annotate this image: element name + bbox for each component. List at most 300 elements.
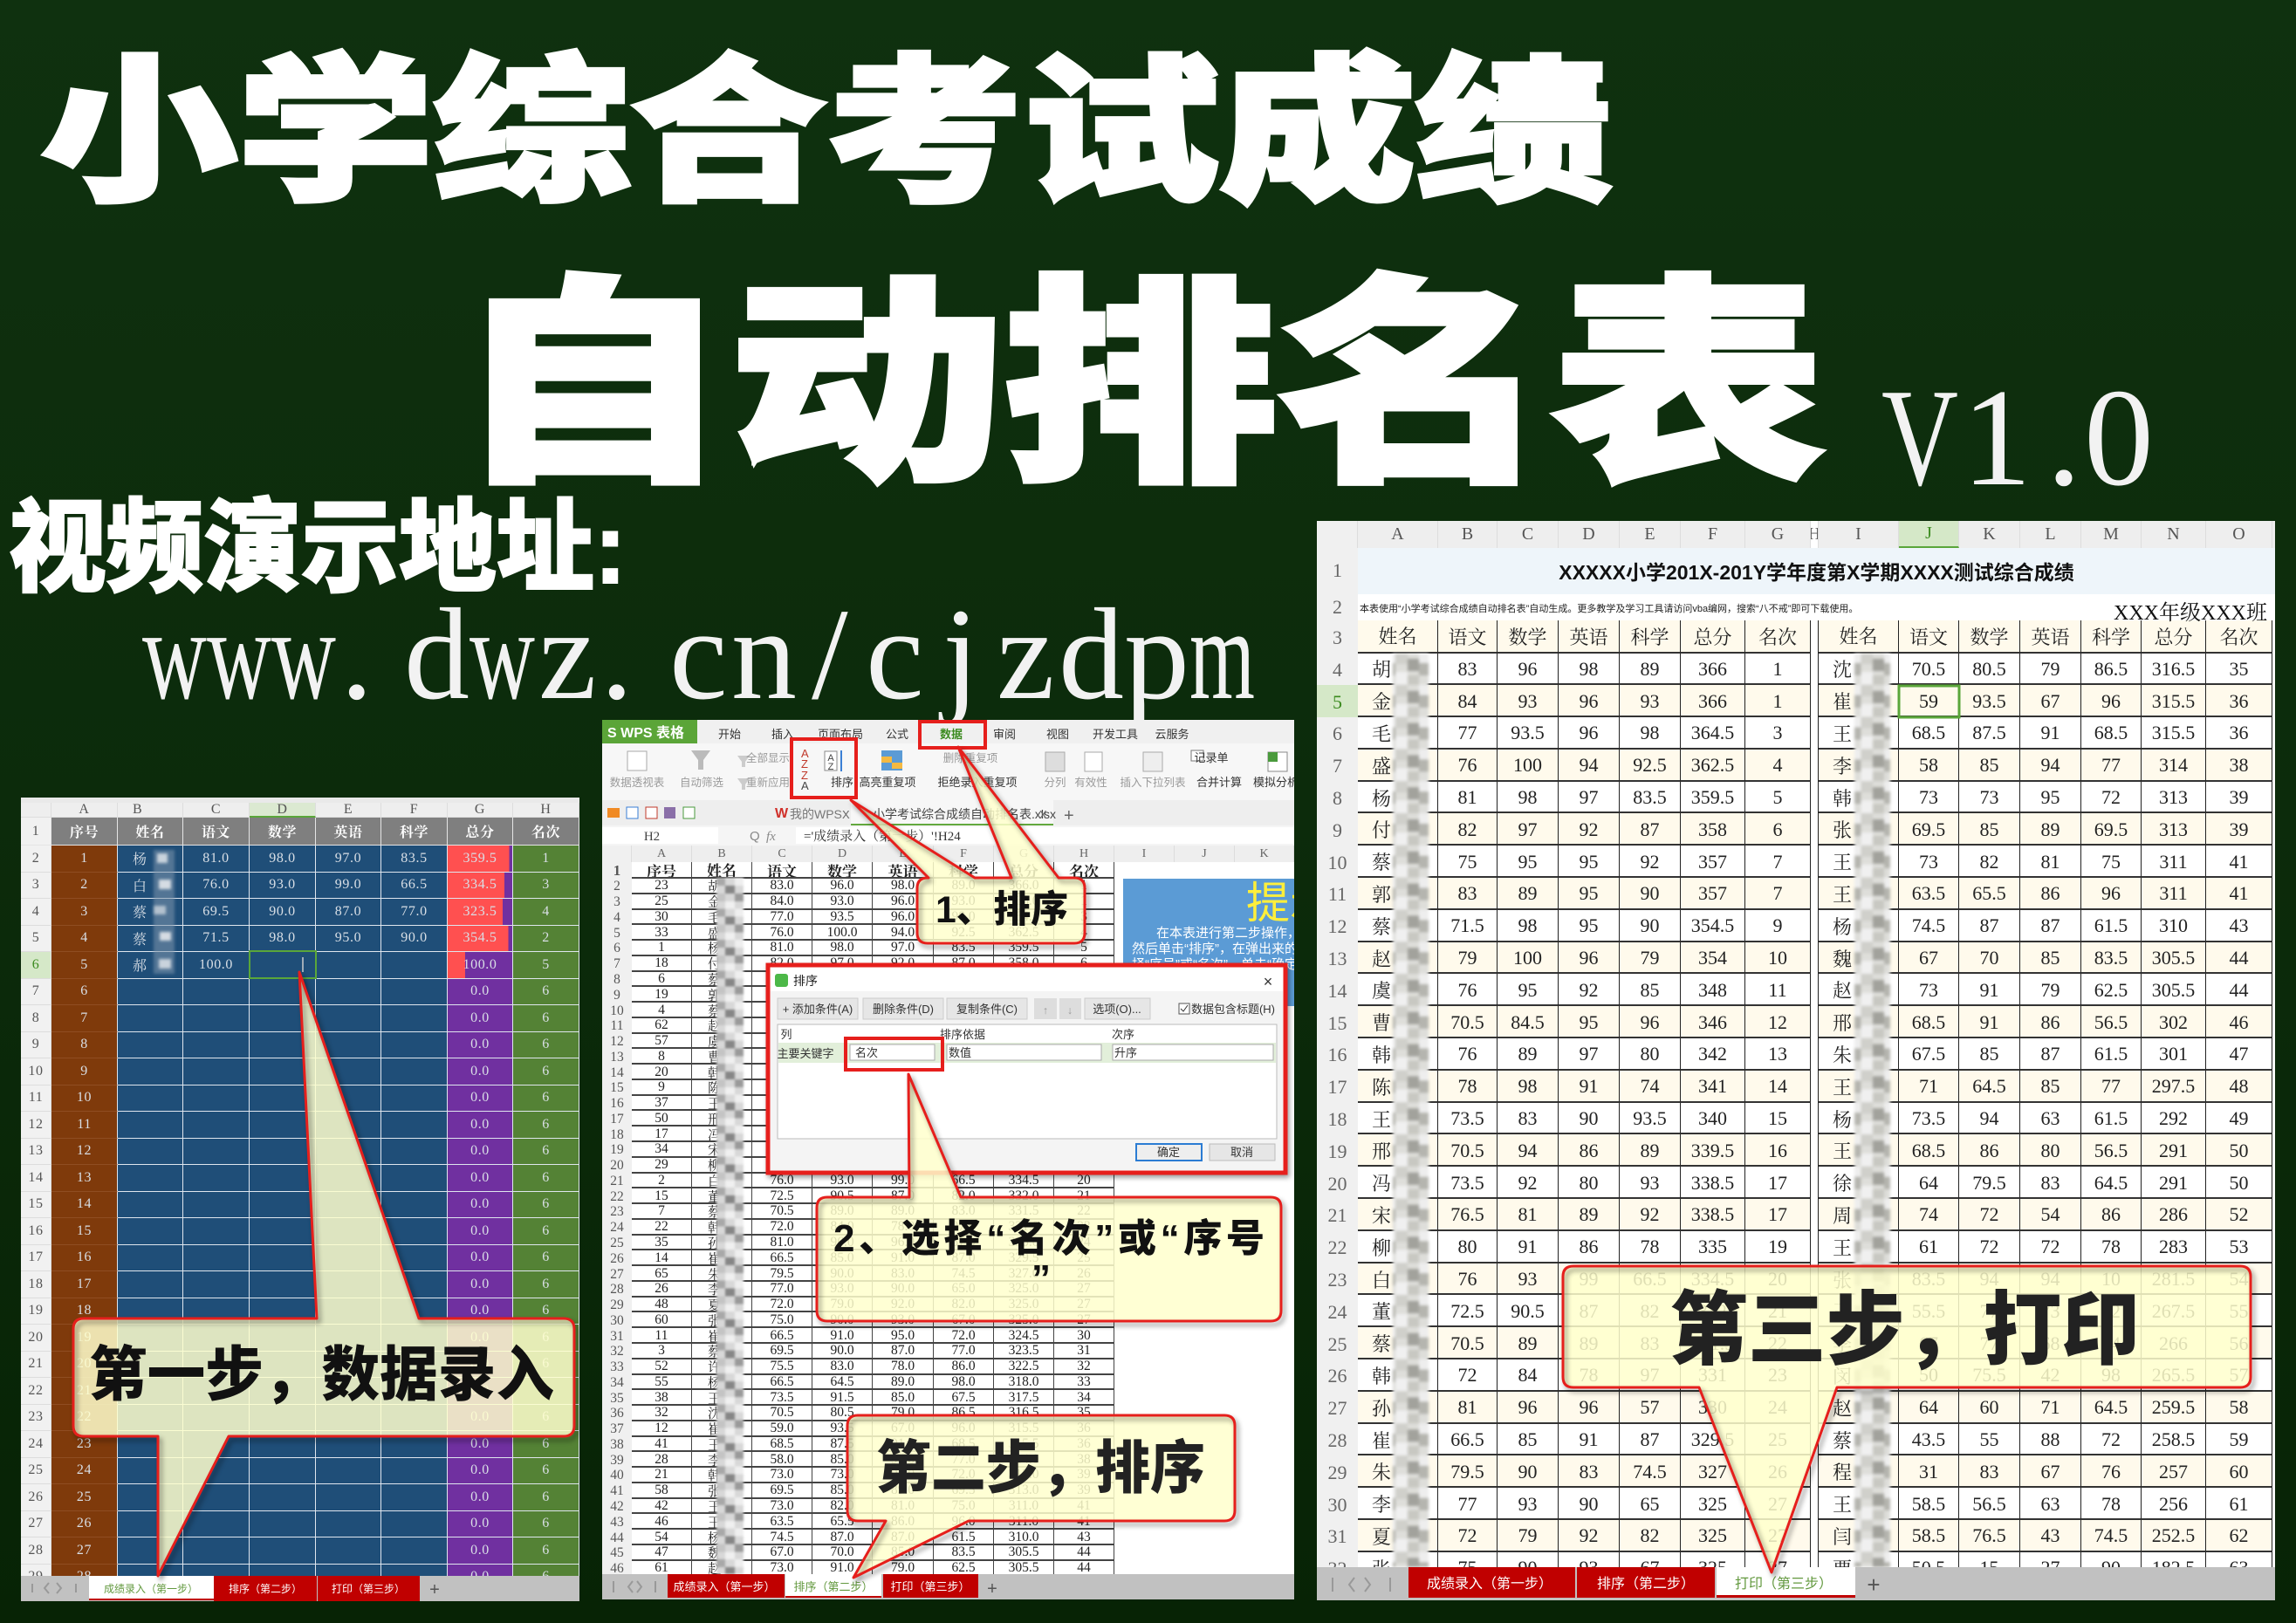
- table: printable class results: 64: [1919, 1396, 1938, 1418]
- table: printable class results: 92: [1580, 818, 1599, 840]
- table: printable class results: 28: [1328, 1429, 1347, 1451]
- table: printable class results: 44: [2229, 947, 2248, 969]
- table: printable class results: 夏: [1372, 1526, 1391, 1548]
- table: sorted scores: 18: [610, 1127, 624, 1142]
- table: printable class results: 313: [2159, 786, 2188, 808]
- table: printable class results: 93.5: [1511, 722, 1545, 743]
- table: printable class results: 310: [2159, 914, 2188, 936]
- table: score entry: 6: [542, 1117, 550, 1132]
- table: printable class results: 85: [1979, 818, 1998, 840]
- version label: 1.0: [1962, 360, 2154, 515]
- table: printable class results: 64.5: [2094, 1172, 2128, 1194]
- table: score entry: 16: [77, 1250, 92, 1264]
- table: score entry: 郝: [133, 959, 147, 974]
- table: printable class results: 86: [2040, 1011, 2060, 1033]
- video demo heading: 视频演示地址:: [9, 491, 627, 605]
- table: score entry: 11: [29, 1090, 43, 1105]
- table: printable class results: 5: [1773, 786, 1782, 808]
- table: printable class results: 59: [2229, 1428, 2248, 1450]
- table: printable class results: 周: [1833, 1205, 1852, 1227]
- table: printable class results: 364.5: [1691, 722, 1734, 743]
- table: printable class results: 蔡: [1372, 852, 1391, 873]
- table: score entry: 0.0: [470, 1143, 490, 1158]
- table: score entry: 0.0: [470, 1383, 490, 1398]
- table: score entry: 0.0: [470, 1436, 490, 1451]
- table: printable class results: 王: [1833, 1237, 1852, 1259]
- sheet tabs: 排序（第二步）: [229, 1582, 302, 1595]
- table: printable class results: 67: [1641, 1557, 1660, 1578]
- table: printable class results: 65: [1641, 1493, 1660, 1515]
- table: printable class results: 267.5: [2152, 1300, 2195, 1322]
- table: printable class results: 70.5: [1912, 658, 1945, 680]
- ribbon tab bar: 插入: [771, 728, 794, 741]
- table: printable class results: 张: [1833, 1270, 1852, 1291]
- sort dialog: ↑: [1043, 1004, 1048, 1017]
- table: sorted scores: 23: [610, 1204, 624, 1219]
- table: score entry: 1: [32, 824, 39, 838]
- table: printable class results: 86: [2101, 1203, 2121, 1225]
- table: score entry: 18: [77, 1303, 92, 1318]
- table: printable class results: 91: [2040, 722, 2060, 743]
- table: printable class results: 76: [2101, 1461, 2121, 1483]
- table: sorted scores: 7: [613, 956, 620, 971]
- table: printable class results: 90.5: [1511, 1300, 1545, 1322]
- ribbon tab bar: 审阅: [993, 728, 1016, 741]
- table: printable class results: 302: [2159, 1011, 2188, 1033]
- table: score entry: 359.5: [463, 851, 497, 866]
- table: printable class results: 90: [1641, 882, 1660, 904]
- table: sorted scores: 29: [610, 1298, 624, 1312]
- table: printable class results: 6: [1333, 722, 1342, 744]
- table: printable class results: 87: [1641, 1428, 1660, 1450]
- table: printable class results: 92: [1518, 1172, 1538, 1194]
- table: printable class results: 69.5: [2094, 818, 2128, 840]
- table: sorted scores: 30: [610, 1313, 624, 1328]
- table: printable class results: 72.5: [1450, 1300, 1484, 1322]
- table: printable class results: 74.5: [1633, 1461, 1667, 1483]
- table: printable class results: 87: [1580, 1300, 1599, 1322]
- table: score entry: 0.0: [470, 1409, 490, 1424]
- table: printable class results: 39: [2229, 786, 2248, 808]
- table: printable class results: 56.5: [2094, 1140, 2128, 1161]
- table: score entry: 6: [542, 983, 550, 998]
- table: printable class results: 赵: [1833, 980, 1852, 1002]
- table: printable class results: 93: [1518, 690, 1538, 712]
- table: printable class results: 魏: [1833, 948, 1852, 970]
- table: printable class results: 281.5: [2152, 1268, 2195, 1290]
- ribbon tools: 排序: [831, 776, 853, 789]
- selected cell J5: [1899, 686, 1959, 717]
- panel: step 3 print sheet: [1317, 521, 2275, 1600]
- ribbon tools: 高亮重复项: [859, 776, 916, 789]
- table: printable class results: 90: [1580, 1107, 1599, 1129]
- table: printable class results: 曹: [1372, 1012, 1391, 1034]
- table: printable class results: 王: [1833, 884, 1852, 906]
- table: printable class results: 70.5: [1450, 1140, 1484, 1161]
- table: printable class results: 95: [1580, 1011, 1599, 1033]
- table: score entry: 334.5: [463, 877, 497, 892]
- ribbon tools: [602, 743, 1299, 800]
- formula bar: Q: [750, 829, 760, 844]
- table: score entry: 81.0: [202, 851, 230, 866]
- table: score entry: 66.5: [401, 877, 428, 892]
- blurred names: [1393, 654, 1890, 1567]
- table: printable class results: 4: [1773, 754, 1782, 776]
- table: printable class results: 邢: [1372, 1140, 1391, 1162]
- ribbon tools: 插入下拉列表: [1120, 776, 1186, 789]
- table: printable class results: 94: [1580, 754, 1599, 776]
- table: printable class results: 43: [2229, 914, 2248, 936]
- table: printable class results: 付: [1372, 819, 1391, 841]
- table: sorted scores: F: [960, 846, 967, 860]
- table: printable class results: 董: [1372, 1301, 1391, 1323]
- quick access toolbar and document tabs: 小学考试综合成绩自动排名表.xlsx: [873, 807, 1056, 821]
- table: printable class results: 94: [1979, 1268, 1998, 1290]
- table: score entry: 5: [542, 957, 550, 972]
- table: printable class results: 语文: [1909, 627, 1948, 648]
- table: printable class results: 62: [2229, 1524, 2248, 1546]
- table: score entry: 23: [28, 1409, 44, 1424]
- table: printable class results: 闵: [1833, 1366, 1852, 1387]
- table: printable class results: 91: [1518, 1236, 1538, 1257]
- table: printable class results: 数学: [1970, 627, 2009, 648]
- table: printable class results: 335: [1698, 1236, 1727, 1257]
- sheet note and class label: XXX年级XXX班: [2114, 602, 2267, 625]
- table: score entry: [21, 803, 579, 1584]
- tip panel: [1123, 868, 1333, 1006]
- table: printable class results: 3: [1333, 627, 1342, 647]
- table: printable class results: 73: [1919, 786, 1938, 808]
- table: score entry: 杨: [133, 853, 147, 867]
- table: printable class results: 92: [1641, 851, 1660, 873]
- table: printable class results: 55.5: [1912, 1300, 1945, 1322]
- table: score entry: 99.0: [335, 877, 361, 892]
- sort dialog: 次序: [1112, 1028, 1134, 1041]
- table: printable class results: 80.5: [1972, 658, 2006, 680]
- table: printable class results: 27: [1328, 1397, 1347, 1419]
- table: score entry: 6: [542, 1409, 550, 1424]
- table: printable class results: 82: [1979, 851, 1998, 873]
- table: printable class results: 94: [1979, 1107, 1998, 1129]
- table: score entry: 5: [80, 957, 88, 972]
- table: score entry: 10: [28, 1064, 44, 1079]
- table: printable class results: 77: [2101, 1075, 2121, 1097]
- table: printable class results: [1317, 521, 2275, 1580]
- table: printable class results: 总分: [2154, 627, 2192, 648]
- table: score entry: 序号: [70, 825, 99, 840]
- table: score entry: 98.0: [269, 851, 296, 866]
- table: printable class results: 21: [1328, 1204, 1347, 1226]
- table: printable class results: 68.5: [1912, 1140, 1945, 1161]
- table: score entry: 20: [28, 1330, 44, 1345]
- table: printable class results: 341: [1698, 1075, 1727, 1097]
- callout: choose rank or number: ”: [1031, 1257, 1051, 1300]
- table: score entry: 14: [28, 1170, 44, 1185]
- table: printable class results: 81: [2040, 851, 2060, 873]
- formula bar: fx: [766, 830, 776, 844]
- panel: step 1 data entry sheet: [21, 798, 579, 1601]
- table: printable class results: 89: [1518, 1332, 1538, 1354]
- table: printable class results: 265.5: [2152, 1364, 2195, 1386]
- table: printable class results: 354.5: [1691, 914, 1734, 936]
- table: printable class results: 76: [1457, 1043, 1477, 1065]
- table: sorted scores: J: [1202, 846, 1207, 860]
- table: score entry: 9: [32, 1037, 39, 1051]
- ribbon tools: 全部显示: [746, 751, 790, 764]
- table: sorted scores: 1: [613, 862, 620, 879]
- table: score entry: 3: [542, 877, 550, 892]
- table: printable class results: 数学: [1508, 627, 1546, 648]
- table: printable class results: 23: [1328, 1269, 1347, 1291]
- table: sorted scores: H: [1079, 846, 1088, 860]
- table: score entry: 5: [32, 930, 39, 945]
- table: printable class results: 68.5: [1912, 722, 1945, 743]
- table: printable class results: 22: [1768, 1332, 1787, 1354]
- table: printable class results: E: [1644, 524, 1655, 544]
- table: printable class results: 301: [2159, 1043, 2188, 1065]
- table: score entry: 12: [77, 1143, 92, 1158]
- table: printable class results: 程: [1833, 1462, 1852, 1483]
- table: score entry: 354.5: [463, 930, 497, 945]
- table: printable class results: 杨: [1372, 788, 1391, 810]
- table: printable class results: 24: [1768, 1396, 1787, 1418]
- blurred names: [154, 850, 175, 974]
- table: printable class results: 67: [1919, 1332, 1938, 1354]
- table: score entry: 0.0: [470, 1010, 490, 1025]
- table: printable class results: K: [1983, 524, 1996, 544]
- table: printable class results: 7: [1333, 755, 1342, 777]
- table: sorted scores: 31: [610, 1329, 624, 1344]
- table: score entry: 100.0: [463, 957, 497, 972]
- table: printable class results: 16: [1328, 1044, 1347, 1065]
- table: printable class results: 85: [2040, 1075, 2060, 1097]
- table: printable class results: 韩: [1833, 788, 1852, 810]
- table: printable class results: 柳: [1372, 1237, 1391, 1259]
- table: score entry: 90.0: [269, 904, 296, 919]
- table: printable class results: 90: [1580, 1493, 1599, 1515]
- ribbon tab bar: 开始: [718, 728, 741, 741]
- table: printable class results: 19: [1768, 1236, 1787, 1257]
- table: sorted scores: 22: [610, 1189, 624, 1204]
- table: score entry: 23: [77, 1436, 92, 1451]
- table: score entry: 22: [77, 1409, 92, 1424]
- table: printable class results: 9: [1773, 914, 1782, 936]
- table: printable class results: 32: [1328, 1558, 1347, 1579]
- table: score entry: 0.0: [470, 1489, 490, 1504]
- sort dialog: 排序: [793, 974, 818, 988]
- table: score entry: 0.0: [470, 1037, 490, 1051]
- table: printable class results: 21: [1768, 1300, 1787, 1322]
- sheet note and class label: 本表使用“小学考试综合成绩自动排名表”自动生成。更多教学及学习工具请访问vba编网，搜索“八不戒”即可下载使用。: [1360, 604, 1858, 614]
- table: score entry: 323.5: [463, 904, 497, 919]
- table: printable class results: 29: [1328, 1462, 1347, 1483]
- table: score entry: 12: [28, 1117, 44, 1132]
- table: printable class results: 冯: [1372, 1173, 1391, 1195]
- table: sorted scores: B: [717, 846, 726, 860]
- sort dialog: [768, 965, 1285, 1173]
- table: printable class results: 93: [1641, 1172, 1660, 1194]
- table: printable class results: 张: [1372, 1558, 1391, 1580]
- table: printable class results: 83: [1580, 1461, 1599, 1483]
- table: printable class results: 100: [1513, 947, 1542, 969]
- table: printable class results: 96: [1580, 1396, 1599, 1418]
- sort dialog: ×: [1264, 973, 1272, 990]
- table: printable class results: 26: [1328, 1365, 1347, 1387]
- table: printable class results: 58.5: [1912, 1524, 1945, 1546]
- table: score entry: 90.0: [401, 930, 428, 945]
- table: printable class results: C: [1522, 524, 1533, 544]
- table: printable class results: 73.5: [1450, 1172, 1484, 1194]
- table: score entry: 0.0: [470, 1543, 490, 1558]
- table: printable class results: 70: [1979, 947, 1998, 969]
- sheet tabs: 排序（第二步）: [793, 1580, 874, 1593]
- sort dialog: 列: [780, 1028, 792, 1041]
- table: printable class results: 366: [1698, 658, 1727, 680]
- table: printable class results: 31: [1919, 1461, 1938, 1483]
- table: sorted scores: 32: [610, 1344, 624, 1359]
- table: printable class results: 92: [1641, 1203, 1660, 1225]
- table: printable class results: 79: [1641, 947, 1660, 969]
- video demo url: .d: [340, 582, 469, 727]
- table: score entry: 语文: [202, 825, 230, 840]
- table: printable class results: 17: [1768, 1172, 1787, 1194]
- table: printable class results: 73: [1919, 979, 1938, 1001]
- table: printable class results: 98: [1518, 914, 1538, 936]
- table: printable class results: 31: [1328, 1525, 1347, 1547]
- table: printable class results: 89: [1641, 1140, 1660, 1161]
- table: sorted scores: 26: [610, 1251, 624, 1266]
- ribbon tab bar: 数据: [940, 728, 963, 741]
- table: printable class results: 77: [2101, 754, 2121, 776]
- table: score entry: 6: [542, 1330, 550, 1345]
- table: printable class results: 94: [2040, 754, 2060, 776]
- table: printable class results: 27: [1768, 1557, 1787, 1578]
- table: printable class results: 72: [2040, 1236, 2060, 1257]
- sheet tabs: [602, 1574, 1294, 1599]
- table: score entry: 3: [80, 904, 88, 919]
- table: printable class results: 292: [2159, 1107, 2188, 1129]
- table: printable class results: 73: [1919, 851, 1938, 873]
- table: score entry: 87.0: [335, 904, 361, 919]
- red highlight boxes: [792, 722, 985, 1070]
- video demo url: m: [1189, 582, 1255, 727]
- table: score entry: 0.0: [470, 1250, 490, 1264]
- table: score entry: 26: [77, 1516, 92, 1531]
- table: score entry: 25: [77, 1489, 92, 1504]
- table: sorted scores: 24: [610, 1220, 624, 1235]
- table: printable class results: 259.5: [2152, 1396, 2195, 1418]
- table: printable class results: 88: [2040, 1428, 2060, 1450]
- table: printable class results: 93.5: [1972, 690, 2006, 712]
- table: printable class results: 74: [1919, 1203, 1938, 1225]
- table: sorted scores: 36: [610, 1406, 624, 1421]
- callout: sort steps 1: [851, 747, 1085, 943]
- table: printable class results: 49: [2229, 1107, 2248, 1129]
- table: score entry: 0.0: [470, 1277, 490, 1291]
- table: printable class results: 286: [2159, 1203, 2188, 1225]
- table: score entry: 21: [28, 1356, 44, 1371]
- table: printable class results: 291: [2159, 1172, 2188, 1194]
- table: printable class results: 316.5: [2152, 658, 2195, 680]
- table: score entry: 28: [28, 1543, 44, 1558]
- table: printable class results: 27: [1768, 1493, 1787, 1515]
- table: printable class results: 30: [1328, 1494, 1347, 1516]
- table: printable class results: 77: [1979, 1332, 1998, 1354]
- table: sorted scores: 6: [613, 941, 620, 955]
- table: score entry: 0.0: [470, 1090, 490, 1105]
- table: printable class results: 72: [1979, 1236, 1998, 1257]
- table: printable class results: 313: [2159, 818, 2188, 840]
- table: sorted scores: A: [657, 846, 666, 860]
- table: printable class results: 78: [1580, 1364, 1599, 1386]
- table: printable class results: 96: [1518, 658, 1538, 680]
- table: score entry: 6: [542, 1196, 550, 1211]
- table: sorted scores: 39: [610, 1453, 624, 1468]
- callout: step 2 sort: [847, 1415, 1235, 1578]
- table: printable class results: 72: [1457, 1524, 1477, 1546]
- table: printable class results: 18: [1328, 1108, 1347, 1130]
- table: sorted scores: 40: [610, 1468, 624, 1483]
- callout: choose rank or number: 2、选择“名次”或“序号: [833, 1217, 1265, 1260]
- table: printable class results: 郭: [1372, 884, 1391, 906]
- sheet tabs: +: [429, 1580, 440, 1599]
- table: score entry: 0.0: [470, 1330, 490, 1345]
- table: printable class results: 89: [1518, 1043, 1538, 1065]
- table: printable class results: 79: [1457, 947, 1477, 969]
- table: printable class results: 58.5: [1912, 1493, 1945, 1515]
- sheet tabs: 打印（第三步）: [332, 1583, 405, 1595]
- panel: step 2 sort sheet: [602, 720, 1294, 1599]
- table: printable class results: 19: [1328, 1140, 1347, 1162]
- version label: V: [1881, 360, 1958, 515]
- sort dialog: 数值: [949, 1046, 971, 1059]
- selected cell D6: [250, 951, 316, 978]
- table: score entry: 13: [28, 1143, 44, 1158]
- table: printable class results: G: [1772, 524, 1784, 544]
- table: printable class results: 86: [2040, 882, 2060, 904]
- table: printable class results: 15: [1979, 1557, 1998, 1578]
- table: printable class results: 胡: [1372, 659, 1391, 681]
- sort dialog: + 添加条件(A): [783, 1003, 853, 1016]
- table: printable class results: 50: [2229, 1140, 2248, 1161]
- table: printable class results: 68.5: [1912, 1011, 1945, 1033]
- table: printable class results: 98: [1641, 722, 1660, 743]
- sort dialog: 选项(O)...: [1093, 1003, 1141, 1016]
- table: printable class results: 362.5: [1691, 754, 1734, 776]
- table: printable class results: 79.5: [1450, 1461, 1484, 1483]
- table: sorted scores: 46: [610, 1561, 624, 1576]
- table: printable class results: 6: [1773, 818, 1782, 840]
- table: score entry: 27: [28, 1516, 44, 1531]
- table: score entry: 71.5: [202, 930, 230, 945]
- table: printable class results: 12: [1768, 1011, 1787, 1033]
- table: printable class results: 338.5: [1691, 1203, 1734, 1225]
- table: printable class results: 70.5: [1450, 1011, 1484, 1033]
- sort dialog: 确定: [1157, 1146, 1180, 1159]
- table: printable class results: 73.5: [1912, 1107, 1945, 1129]
- table: printable class results: 91: [1979, 979, 1998, 1001]
- table: printable class results: 89: [2040, 818, 2060, 840]
- table: printable class results: 24: [1328, 1301, 1347, 1323]
- ribbon tab bar: [602, 720, 1294, 743]
- table: printable class results: 305.5: [2152, 947, 2195, 969]
- ribbon tools: A: [827, 753, 834, 764]
- table: printable class results: 26: [1768, 1461, 1787, 1483]
- table: printable class results: 82: [1457, 818, 1477, 840]
- table: printable class results: 89: [1580, 1203, 1599, 1225]
- table: score entry: 8: [32, 1010, 39, 1025]
- table: printable class results: 61: [1919, 1236, 1938, 1257]
